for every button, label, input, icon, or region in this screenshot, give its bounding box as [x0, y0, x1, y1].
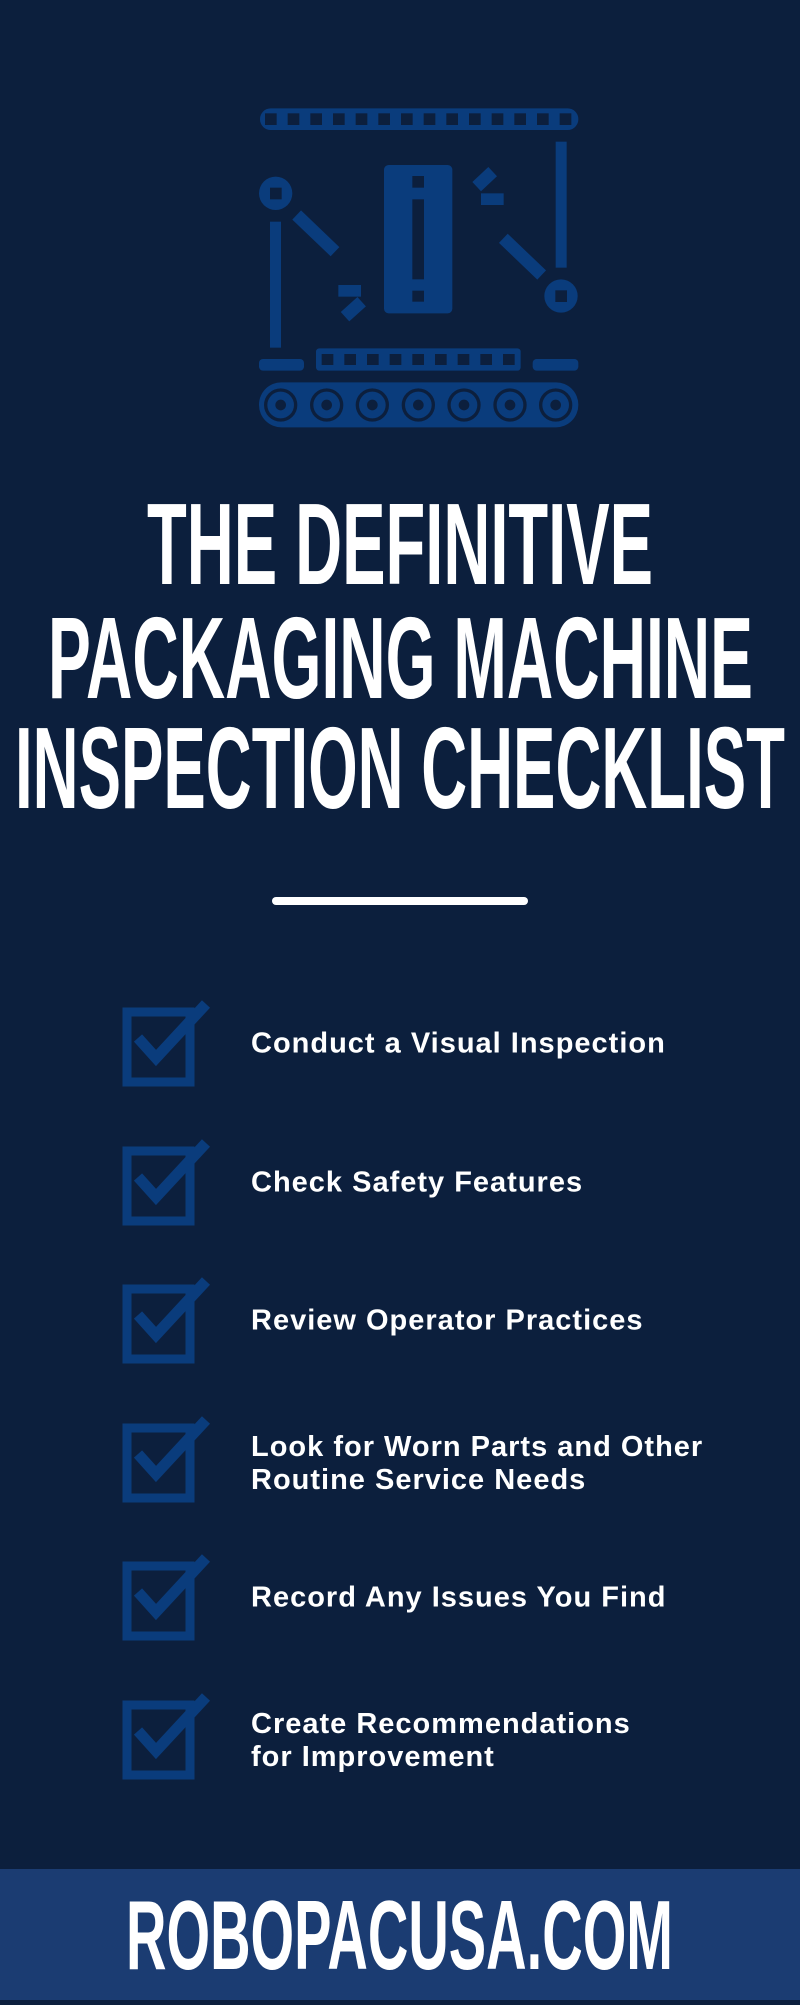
item 1 [122, 1000, 666, 1086]
item 2: Check Safety Features [251, 1166, 583, 1198]
item 3 [122, 1277, 644, 1364]
item 6: for Improvement [251, 1741, 495, 1773]
item 6 [122, 1693, 631, 1780]
item 4: Look for Worn Parts and Other [251, 1431, 703, 1463]
item 3: Review Operator Practices [251, 1304, 644, 1336]
title [15, 480, 785, 833]
item 4: Routine Service Needs [251, 1464, 586, 1496]
icon: packaging machine [259, 108, 578, 428]
item 4 [122, 1416, 703, 1502]
item 1: Conduct a Visual Inspection [251, 1028, 666, 1060]
item 6: Create Recommendations [251, 1708, 631, 1740]
item 5 [122, 1554, 666, 1640]
item 2 [122, 1139, 583, 1226]
item 5: Record Any Issues You Find [251, 1582, 666, 1614]
divider [272, 897, 528, 905]
